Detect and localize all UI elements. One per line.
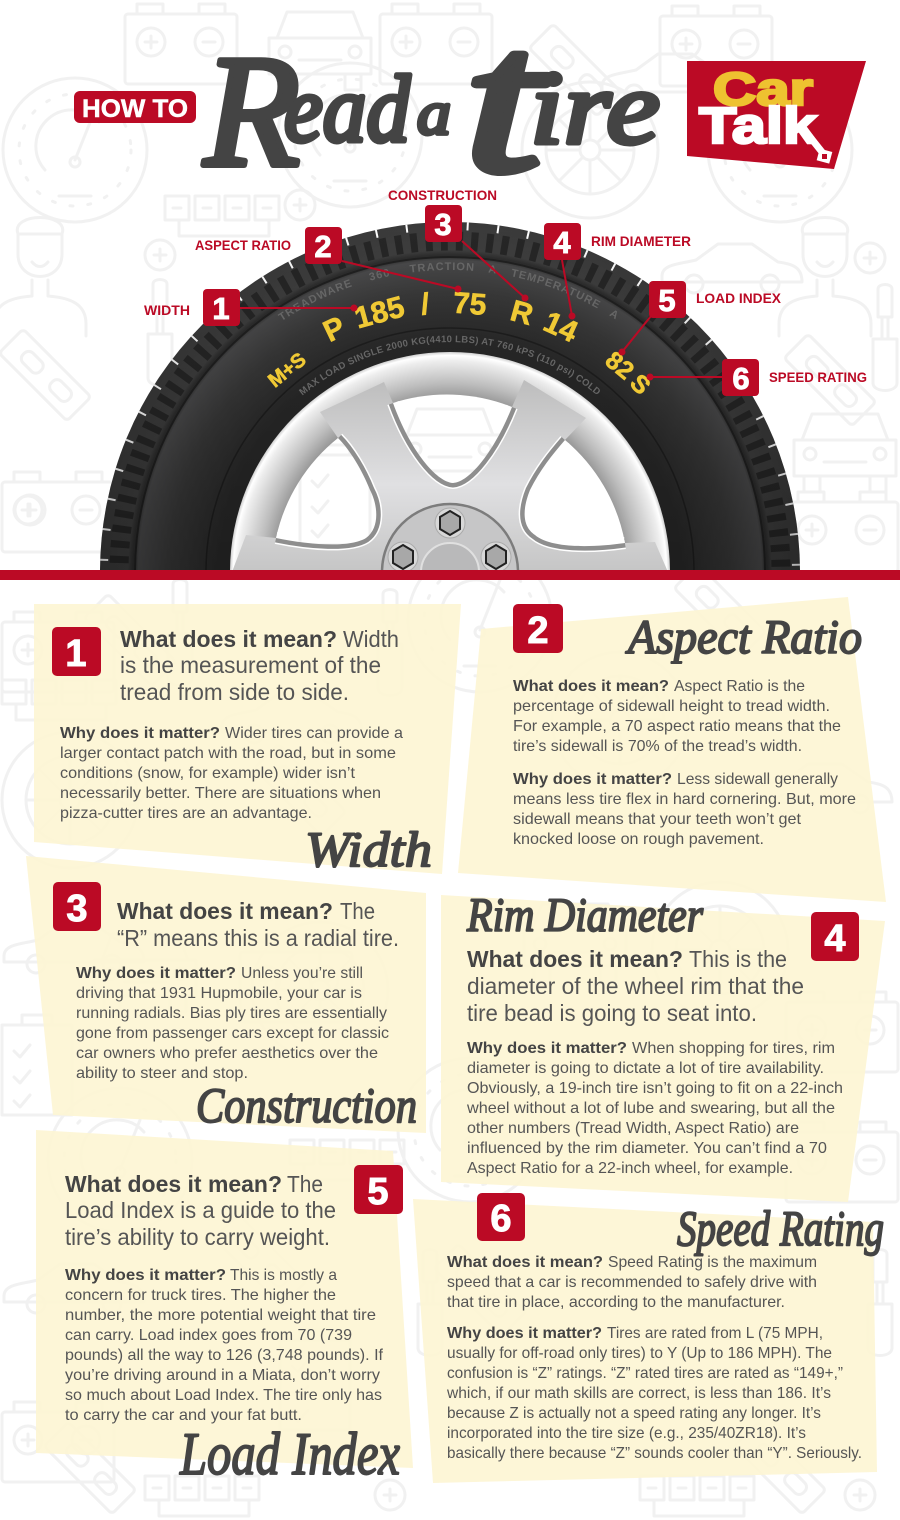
- callout: 1 width: 1: [212, 291, 230, 326]
- callout lines: [239, 241, 722, 380]
- callout: 5 load index: LOAD INDEX: [696, 290, 782, 306]
- panel: rim diameter: What does it mean?: [467, 946, 683, 972]
- panel: width: conditions (snow, for example) wider isn’t: [60, 765, 356, 782]
- panel: speed rating: 6: [490, 1198, 512, 1240]
- panel: aspect ratio: knocked loose on rough pavement.: [513, 831, 764, 848]
- panel: rim diameter: This is the: [689, 946, 787, 972]
- panel: width: 1: [65, 633, 87, 675]
- logo: car talk: [687, 61, 866, 169]
- sidewall small print: A: [488, 265, 496, 274]
- panel: construction: What does it mean?: [117, 898, 333, 924]
- panel: width: larger contact patch with the road, but in some: [60, 745, 396, 762]
- callout: 3 construction: [388, 187, 497, 242]
- panel: width: is the measurement of the: [120, 652, 381, 678]
- panel: speed rating: Tires are rated from L (75 MPH,: [607, 1325, 823, 1342]
- panel: aspect ratio: means less tire flex in hard cornering. But, more: [513, 791, 856, 808]
- callout: 2 aspect ratio: ASPECT RATIO: [195, 237, 291, 253]
- title: read a tire: ead: [284, 56, 410, 162]
- panel: load index: tire’s ability to carry weight.: [65, 1224, 330, 1250]
- title: read a tire: R: [203, 22, 300, 200]
- title: read a tire: a: [417, 80, 451, 148]
- panel: construction: car owners who prefer aesthetics over the: [76, 1045, 378, 1062]
- sidewall small print: TRACTION: [410, 262, 474, 272]
- panel: width: [52, 626, 432, 877]
- panel: construction: The: [340, 898, 375, 924]
- tire size code: R: [507, 294, 537, 332]
- panel: construction: gone from passenger cars except for classic: [76, 1025, 389, 1042]
- panel: rim diameter: Obviously, a 19-inch tire isn’t going to fit on a 22-inch: [467, 1080, 843, 1097]
- panel: rim diameter: other numbers (Tread Width, Aspect Ratio) are: [467, 1120, 799, 1137]
- tire size code: [266, 292, 650, 394]
- panel: load index: What does it mean?: [65, 1171, 282, 1197]
- panel: width: Why does it matter?: [60, 725, 220, 742]
- panel: speed rating: that tire in place, according to the manufacturer.: [447, 1294, 785, 1311]
- panel: rim diameter: influenced by the rim diameter. You can’t find a 70: [467, 1140, 827, 1157]
- panel: speed rating: which, if our math skills are correct, is less than 186. It’s: [446, 1385, 831, 1402]
- panel: construction: Why does it matter?: [76, 965, 236, 982]
- callout: 3 construction: 3: [434, 207, 452, 242]
- panel: aspect ratio: Less sidewall generally: [677, 771, 838, 788]
- panel: rim diameter: When shopping for tires, rim: [632, 1040, 835, 1057]
- tire body: [100, 222, 800, 570]
- panel: rim diameter: wheel without a lot of lube and swearing, but all the: [466, 1100, 835, 1117]
- panel: speed rating: What does it mean?: [447, 1254, 603, 1271]
- panel: rim diameter: tire bead is going to seat into.: [467, 1000, 757, 1026]
- panel: width: tread from side to side.: [120, 679, 349, 705]
- panel: construction: running radials. Bias ply tires are essentially: [76, 1005, 387, 1022]
- panel: load index: [65, 1165, 403, 1487]
- panel: load index: This is mostly a: [230, 1267, 337, 1284]
- sidewall small print: 360: [369, 269, 389, 280]
- panel: load index: pounds) all the way to 126 (3,748 pounds). If: [65, 1347, 384, 1364]
- panel: rim diameter: Aspect Ratio for a 22-inch wheel, for example.: [467, 1160, 793, 1177]
- panel: aspect ratio: For example, a 70 aspect ratio means that the: [513, 718, 841, 735]
- callout: 1 width: WIDTH: [144, 302, 190, 318]
- callout: 5 load index: 5: [658, 283, 676, 318]
- callout: 1 width: [144, 289, 240, 326]
- panel: construction: driving that 1931 Hupmobile, your car is: [76, 985, 362, 1002]
- panel: aspect ratio: Why does it matter?: [513, 771, 672, 788]
- panel: aspect ratio: Aspect Ratio is the: [674, 678, 805, 695]
- sidewall small print: [278, 262, 617, 396]
- wheel rim: [230, 352, 670, 570]
- panel: load index: Load Index: [179, 1421, 400, 1487]
- panel: aspect ratio: 2: [527, 610, 549, 652]
- sidewall small print: A: [609, 310, 617, 320]
- badge: how to: HOW TO: [82, 95, 188, 123]
- callout: 5 load index: [649, 281, 782, 318]
- panel: construction: 3: [66, 888, 88, 930]
- panel: load index: so much about Load Index. The tire only has: [65, 1387, 382, 1404]
- callout: 3 construction: CONSTRUCTION: [388, 187, 497, 203]
- panel: speed rating: incorporated into the tire size (e.g., 235/40ZR18). It’s: [447, 1425, 806, 1442]
- panel: rim diameter: 4: [824, 918, 846, 960]
- tire size code: 14: [538, 305, 583, 349]
- callout: 2 aspect ratio: [195, 227, 342, 264]
- panel: aspect ratio: sidewall means that your teeth won’t get: [513, 811, 802, 828]
- callout: 4 rim diameter: RIM DIAMETER: [591, 233, 691, 249]
- panel: speed rating: Speed Rating is the maximum: [608, 1254, 817, 1271]
- panel: speed rating: Why does it matter?: [447, 1325, 602, 1342]
- panel: rim diameter: Rim Diameter: [466, 889, 703, 942]
- panel: aspect ratio: percentage of sidewall height to tread width.: [513, 698, 830, 715]
- tire size code: 185: [351, 290, 408, 335]
- callout: 6 speed rating: 6: [732, 361, 750, 396]
- title: read a tire: ire: [530, 49, 660, 166]
- panel: construction: ability to steer and stop.: [76, 1065, 248, 1082]
- panel: load index: 5: [367, 1171, 389, 1213]
- panel: aspect ratio: Aspect Ratio: [625, 611, 862, 664]
- wheel hub and lug nuts: [380, 502, 520, 570]
- panel: speed rating: because Z is actually not a speed rating any longer. It’s: [447, 1405, 821, 1422]
- tire illustration: [100, 222, 800, 570]
- bar: red divider: [0, 570, 900, 580]
- panel: width: pizza-cutter tires are an advantage.: [60, 805, 312, 822]
- sidewall small print: TREADWARE: [278, 280, 352, 320]
- panel: speed rating: confusion is “Z” ratings. “Z” rated tires are rated as “149+,”: [447, 1365, 843, 1382]
- panel: speed rating: [446, 1193, 884, 1462]
- panel: construction: [53, 882, 417, 1133]
- panel: load index: number, the more potential weight that tire: [65, 1307, 376, 1324]
- callout: 2 aspect ratio: 2: [314, 229, 332, 264]
- panel: load index: Why does it matter?: [65, 1267, 226, 1284]
- panel: width: necessarily better. There are situations when: [60, 785, 381, 802]
- callout: 6 speed rating: SPEED RATING: [769, 369, 867, 385]
- tire size code: S: [624, 369, 656, 400]
- panel: load index: to carry the car and your fat butt.: [65, 1407, 302, 1424]
- panel: load index: Load Index is a guide to the: [65, 1197, 336, 1223]
- panel: rim diameter: [466, 889, 859, 1177]
- panel: width: Width: [305, 821, 432, 877]
- tire size code: P: [318, 310, 351, 349]
- panel: load index: concern for truck tires. The higher the: [65, 1287, 336, 1304]
- panel: rim diameter: Why does it matter?: [467, 1040, 627, 1057]
- tire size code: 82: [600, 346, 639, 385]
- callout: 6 speed rating: [722, 359, 867, 396]
- panel: load index: you’re driving around in a Miata, don’t worry: [65, 1367, 380, 1384]
- panel: width: Width: [343, 626, 399, 652]
- logo: car talk: Talk: [699, 97, 818, 154]
- panel: rim diameter: diameter is going to dictate a lot of tire availability.: [467, 1060, 824, 1077]
- panel: aspect ratio: What does it mean?: [513, 678, 669, 695]
- panel: rim diameter: diameter of the wheel rim that the: [467, 973, 804, 999]
- title: read a tire: [203, 0, 660, 215]
- panel: construction: Construction: [196, 1077, 417, 1133]
- panel: load index: The: [287, 1171, 323, 1197]
- panel: speed rating: usually for off-road only tires) to Y (Up to 186 MPH). The: [447, 1345, 832, 1362]
- sidewall small print: TEMPERATURE: [512, 268, 600, 308]
- logo: car talk: Car: [713, 63, 813, 115]
- callout: 4 rim diameter: [544, 223, 691, 260]
- callout: 4 rim diameter: 4: [553, 225, 571, 260]
- tire size code: /: [420, 288, 432, 321]
- panel: construction: Unless you’re still: [241, 965, 363, 982]
- panel: speed rating: speed that a car is recommended to safely drive with: [447, 1274, 817, 1291]
- tire size code: M+S: [264, 349, 310, 392]
- panel: aspect ratio: tire’s sidewall is 70% of the tread’s width.: [513, 738, 802, 755]
- panel backgrounds: [26, 597, 886, 1483]
- panel: aspect ratio: [513, 604, 862, 848]
- panel: width: Wider tires can provide a: [225, 725, 403, 742]
- sidewall small print: MAX LOAD SINGLE 2000 KG(4410 LBS) AT 760 kPS (110 psi) COLD: [298, 336, 600, 396]
- panel: width: What does it mean?: [120, 626, 337, 652]
- tire size code: 75: [452, 287, 488, 322]
- panel: load index: can carry. Load index goes from 70 (739: [65, 1327, 352, 1344]
- panel: speed rating: basically there because “Z” sounds cooler than “Y”. Seriously.: [447, 1445, 862, 1462]
- panel: construction: “R” means this is a radial tire.: [117, 925, 399, 951]
